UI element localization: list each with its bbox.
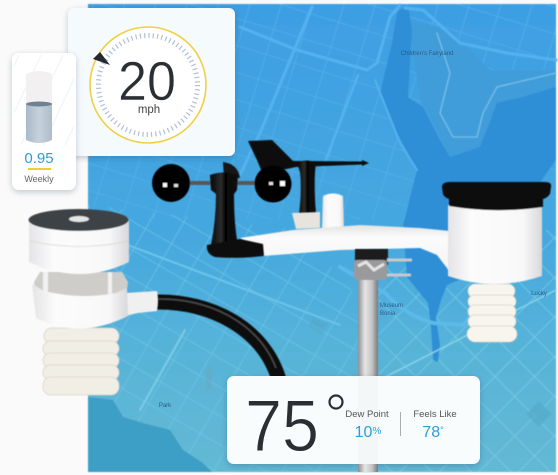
degree sign bbox=[330, 396, 342, 408]
temperature card bbox=[227, 376, 480, 467]
upper body bbox=[29, 221, 129, 274]
right cup bbox=[254, 166, 292, 202]
map labels bbox=[159, 51, 547, 409]
gauge dial bbox=[90, 27, 206, 143]
cable bbox=[156, 299, 279, 380]
bay water bbox=[88, 397, 212, 472]
temperature value: 75 bbox=[245, 386, 319, 467]
gauge louvers bbox=[467, 284, 517, 342]
rain cylinder bbox=[26, 71, 52, 143]
pole below card bbox=[358, 464, 378, 472]
map labels: Museum bbox=[380, 303, 403, 309]
map labels: Bonia bbox=[380, 311, 396, 317]
gray inner chamber bbox=[34, 272, 128, 298]
dew point: Dew Point bbox=[345, 409, 389, 420]
rainfall card bbox=[12, 53, 76, 190]
divider bbox=[400, 412, 401, 436]
dew point: % bbox=[372, 426, 381, 437]
sensor louvers bbox=[43, 328, 119, 395]
temperature sensor bbox=[28, 209, 158, 395]
struts bbox=[43, 272, 112, 297]
connector bbox=[125, 291, 158, 316]
lake water bbox=[380, 8, 556, 362]
wind vane base and white cylinder bbox=[292, 194, 344, 231]
speed value: 20 bbox=[118, 50, 176, 112]
wind vane bbox=[248, 140, 369, 214]
dew point: 10 bbox=[355, 424, 372, 441]
solar top bbox=[28, 209, 128, 231]
peninsula park bbox=[408, 20, 556, 157]
rain value: 0.95 bbox=[24, 150, 54, 167]
anemometer bbox=[152, 162, 292, 258]
left cup bbox=[152, 164, 190, 202]
major roads bbox=[88, 5, 556, 410]
rain period: Weekly bbox=[24, 174, 54, 184]
rotor column bbox=[210, 172, 238, 245]
needle icon bbox=[93, 52, 110, 65]
anemometer base bbox=[207, 239, 264, 258]
city blocks bbox=[308, 317, 327, 334]
map labels: Lucky bbox=[531, 291, 547, 297]
feels like bbox=[413, 409, 457, 441]
map labels: Children's Fairyland bbox=[401, 51, 453, 57]
gauge body bbox=[448, 205, 542, 284]
white mounting arm bbox=[240, 225, 450, 272]
lower ring bbox=[32, 284, 128, 329]
speed unit: mph bbox=[138, 104, 160, 116]
yellow underline bbox=[28, 168, 51, 170]
rain gauge bbox=[442, 182, 551, 342]
dew point bbox=[345, 409, 389, 441]
feels like: Feels Like bbox=[413, 409, 457, 420]
wind speed card bbox=[68, 8, 235, 156]
gauge funnel rim bbox=[442, 182, 551, 210]
feels like: 78 bbox=[422, 424, 440, 441]
map labels: Park bbox=[159, 403, 172, 409]
pole mount bbox=[354, 249, 412, 380]
feels like: ° bbox=[440, 425, 444, 435]
